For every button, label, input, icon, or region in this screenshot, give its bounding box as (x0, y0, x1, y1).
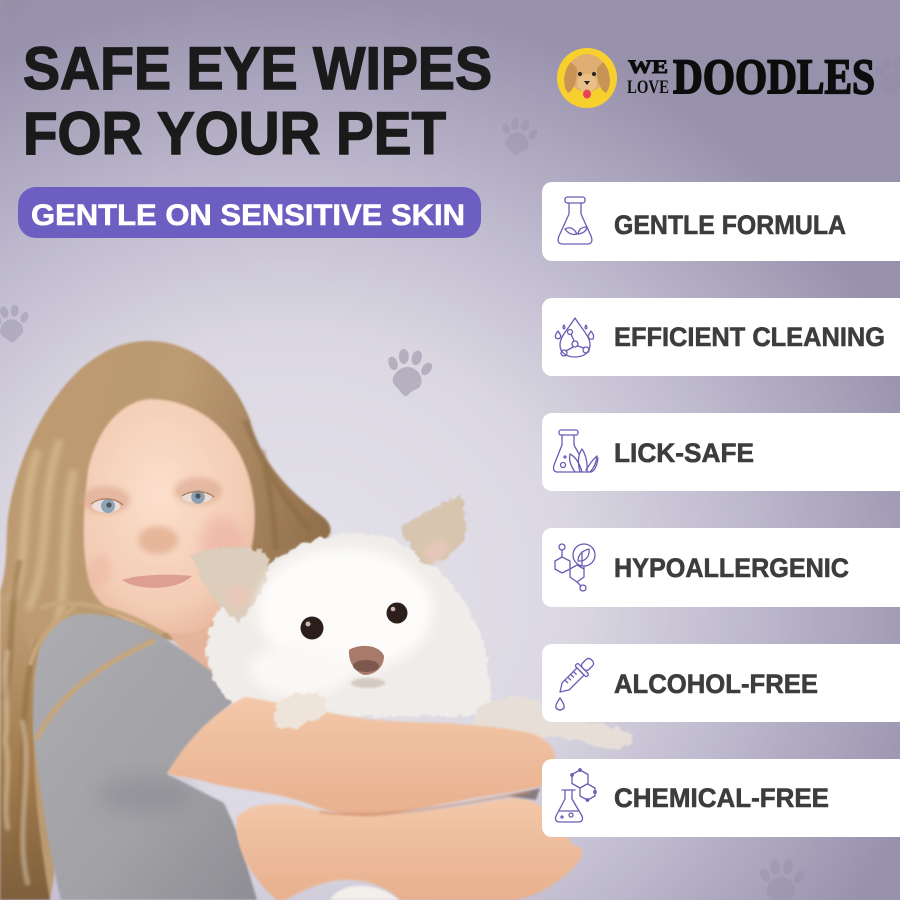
white chihuahua (190, 494, 634, 900)
girl's eyes, nose and mouth (82, 477, 244, 588)
panel: efficient cleaning (542, 298, 900, 376)
girl's hair (0, 341, 331, 900)
icon: hexagon molecule with leaf (555, 544, 595, 591)
logo: We Love Doodles (557, 48, 875, 108)
icon: flask with leaves (558, 197, 592, 244)
panel: gentle formula (542, 182, 900, 261)
icon: droplet with molecule (555, 318, 594, 357)
dog's face details (250, 548, 433, 696)
logo wordmark: WE (628, 57, 668, 78)
photo: girl hugging white dog (0, 341, 634, 900)
title: FOR YOUR PET (23, 100, 446, 167)
subtitle pill: GENTLE ON SENSITIVE SKIN (31, 199, 465, 232)
icon: doodle dog face (557, 48, 617, 108)
panel: lick-safe (542, 413, 900, 491)
panel: alcohol-free: ALCOHOL-FREE (614, 669, 818, 699)
shadow between arms (508, 788, 540, 800)
dog's left ear (190, 547, 268, 622)
panel: hypoallergenic (542, 528, 900, 607)
panel: efficient cleaning: EFFICIENT CLEANING (614, 322, 885, 352)
panel: chemical-free: CHEMICAL-FREE (614, 783, 829, 813)
girl's upper arm (167, 697, 555, 817)
icon: flask with aloe (554, 430, 598, 472)
dog's right ear (402, 494, 465, 566)
girl's lower arm (236, 798, 583, 900)
icon: dropper (554, 655, 597, 710)
panel: alcohol-free (542, 644, 900, 722)
subtitle pill (18, 187, 481, 238)
loose hair strands over shirt (30, 603, 163, 740)
title (23, 35, 492, 167)
girl's grey t-shirt (33, 614, 257, 900)
panel: chemical-free (542, 759, 900, 837)
icon: flask with molecules (556, 769, 596, 822)
title: SAFE EYE WIPES (23, 35, 492, 102)
dog's front paw (272, 693, 326, 729)
dog belly below arms (330, 886, 400, 900)
panel: lick-safe: LICK-SAFE (614, 438, 754, 468)
panel: hypoallergenic: HYPOALLERGENIC (614, 553, 849, 583)
logo wordmark: LOVE (627, 77, 669, 98)
girl's face and neck (82, 399, 255, 680)
panel: gentle formula: GENTLE FORMULA (614, 210, 846, 240)
